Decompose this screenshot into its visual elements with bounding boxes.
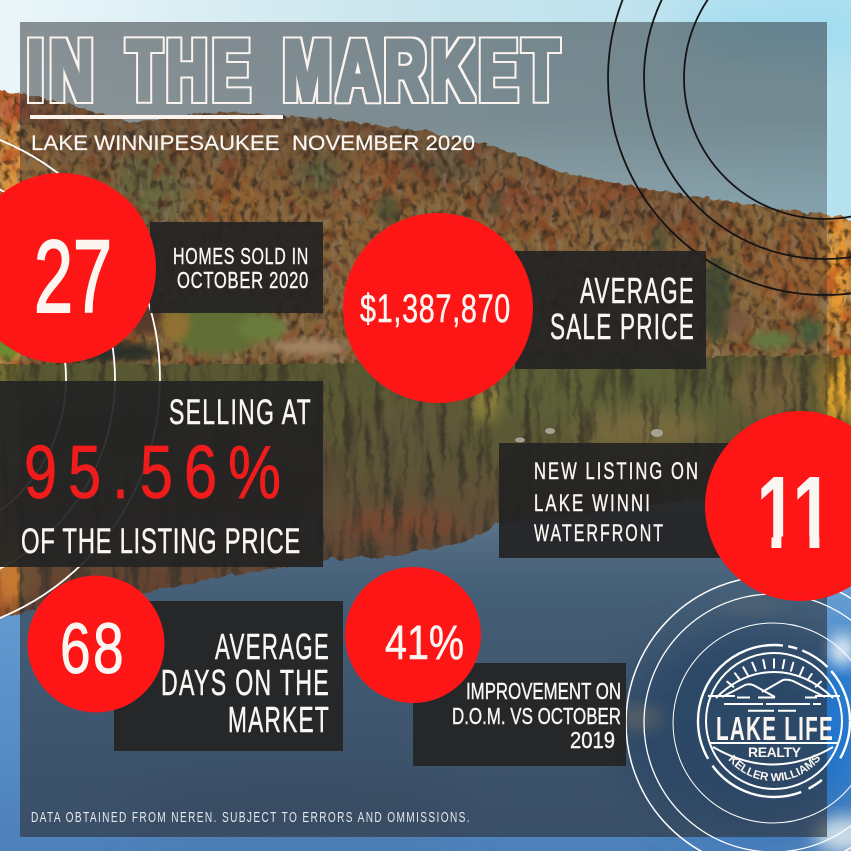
forest hillside	[0, 80, 851, 365]
improvement label box: IMPROVEMENT ON	[466, 678, 621, 704]
logo keller williams: KELLER WILLIAMS	[728, 754, 820, 782]
red circle: 11	[705, 411, 851, 601]
new listing label box: NEW LISTING ON	[534, 458, 700, 485]
homes sold label box: OCTOBER 2020	[177, 267, 309, 293]
red circle: sale price	[343, 213, 533, 403]
days on market label box	[114, 601, 343, 751]
title: in the market: MARKET	[283, 23, 564, 119]
logo sun rays	[727, 659, 821, 687]
white decorative rings left	[0, 120, 160, 638]
improvement label box: 2019	[570, 727, 615, 753]
percentage: 95.56%	[24, 430, 292, 514]
selling at: SELLING AT	[169, 393, 312, 432]
days on market label box: DAYS ON THE	[161, 662, 330, 703]
water clouds	[130, 630, 851, 840]
stat: improvement on days on market	[345, 567, 626, 766]
days on market label box: MARKET	[228, 699, 330, 740]
new listing label box: WATERFRONT	[534, 520, 665, 547]
days on market label box: AVERAGE	[215, 626, 330, 667]
white decorative rings bottom right	[626, 576, 851, 851]
red circle: 27	[0, 173, 156, 363]
logo mountains and water	[708, 672, 840, 764]
improvement label box: D.O.M. VS OCTOBER	[452, 703, 621, 729]
homes sold label box: HOMES SOLD IN	[173, 243, 309, 269]
of the listing price: OF THE LISTING PRICE	[21, 522, 301, 561]
stat: homes sold	[0, 173, 323, 363]
logo: lake life realty	[696, 644, 851, 798]
stat: selling at percent of listing price	[0, 381, 323, 567]
red circle: 41%: 41%	[385, 617, 464, 670]
title: in the market: IN	[27, 23, 99, 119]
subtitle: LAKE WINNIPESAUKEE NOVEMBER 2020	[31, 132, 475, 155]
red circle: 27: 27	[34, 219, 112, 334]
data source note: DATA OBTAINED FROM NEREN. SUBJECT TO ERRORS AND OMMISSIONS.	[31, 810, 471, 826]
sale price label box: AVERAGE	[580, 270, 695, 311]
black decorative rings top right	[608, 0, 851, 295]
logo realty: REALTY	[748, 744, 802, 760]
new listing label box: LAKE WINNI	[534, 490, 652, 517]
red circle: 68	[28, 576, 164, 712]
improvement label box	[413, 663, 626, 766]
red circle: 41%	[345, 567, 481, 703]
logo rings	[698, 645, 850, 797]
title: in the market: THE	[127, 23, 255, 119]
red circle: sale price: $1,387,870	[360, 287, 511, 331]
sale price label box	[515, 251, 706, 369]
stat: new listings	[499, 411, 851, 601]
title: in the market	[27, 23, 564, 119]
reflected forest	[0, 345, 851, 625]
title underline	[30, 115, 283, 119]
new listing label box	[499, 443, 740, 558]
stat: average sale price	[343, 213, 706, 403]
red circle: 68: 68	[60, 610, 126, 689]
homes sold label box	[150, 222, 323, 313]
stat: average days on market	[28, 576, 343, 751]
sale price label box: SALE PRICE	[550, 306, 695, 347]
